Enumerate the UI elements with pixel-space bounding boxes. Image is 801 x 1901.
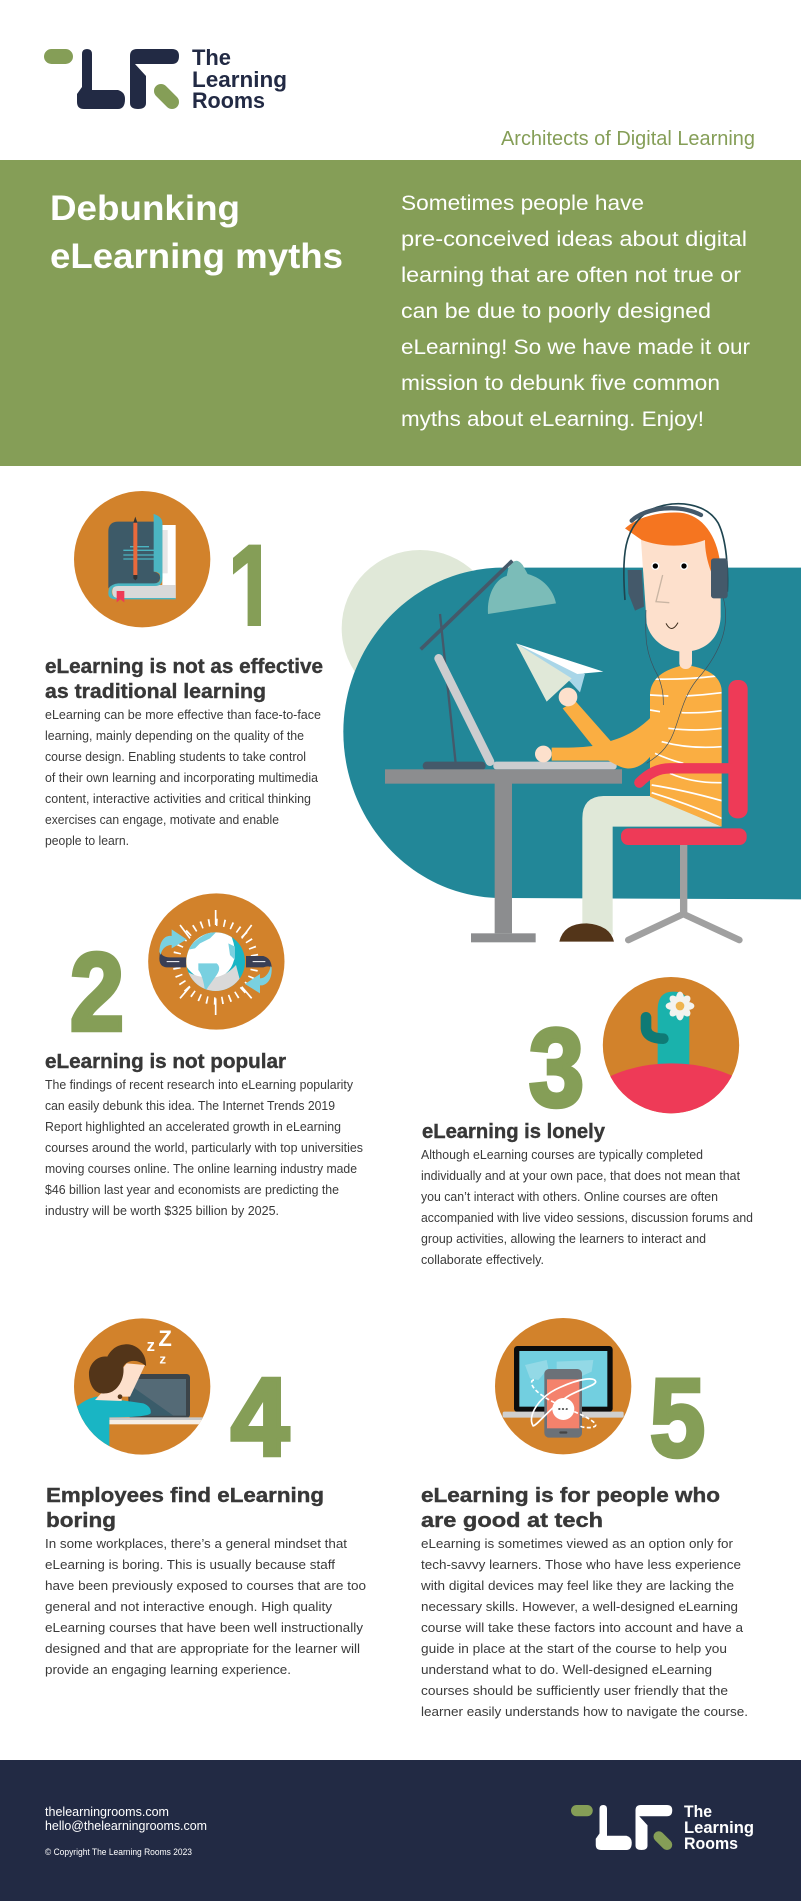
hands xyxy=(535,688,577,762)
body text: group activities, allowing the learners to interact and xyxy=(421,1231,706,1246)
heading: eLearning is not as effective xyxy=(45,655,323,678)
body text: have been previously exposed to courses that are too xyxy=(45,1578,366,1593)
header logo: Rooms xyxy=(192,88,265,113)
trousers and shoe xyxy=(559,796,722,942)
body text: individually and at your own pace, that does not mean that xyxy=(421,1168,740,1183)
footer contact text: hello@thelearningrooms.com xyxy=(45,1818,207,1833)
body text: tech-savvy learners. Those who have less experience xyxy=(421,1557,741,1572)
icon: person asleep at laptop: z xyxy=(159,1351,166,1366)
icon: globe with arrows xyxy=(148,893,284,1030)
body text: course design. Enabling students to take control xyxy=(45,749,306,764)
tagline: Architects of Digital Learning xyxy=(501,128,755,150)
body text: $46 billion last year and economists are predicting the xyxy=(45,1182,339,1197)
banner intro text: pre-conceived ideas about digital xyxy=(401,228,747,251)
body text: In some workplaces, there’s a general mindset that xyxy=(45,1536,347,1551)
heading: as traditional learning xyxy=(45,680,266,703)
body text: learner easily understands how to navigate the course. xyxy=(421,1704,748,1719)
body text: understand what to do. Well-designed eLearning xyxy=(421,1662,712,1677)
body text: you can’t interact with others. Online courses are often xyxy=(421,1189,718,1204)
banner intro text: myths about eLearning. Enjoy! xyxy=(401,408,704,431)
body text: The findings of recent research into eLearning popularity xyxy=(45,1077,353,1092)
body text xyxy=(45,707,321,848)
body text: course will take these factors into account and have a xyxy=(421,1620,744,1635)
banner intro text: eLearning! So we have made it our xyxy=(401,336,750,359)
header logo: The xyxy=(192,45,231,70)
banner intro text: learning that are often not true or xyxy=(401,264,741,287)
body text: eLearning courses that have been well instructionally xyxy=(45,1620,364,1635)
numeral 5: 5 xyxy=(650,1357,705,1480)
numeral 1: 1 xyxy=(223,516,283,671)
body text: learning, mainly depending on the quality of the xyxy=(45,728,304,743)
myth 2 panel xyxy=(45,893,363,1218)
desk xyxy=(385,769,622,942)
footer logo: The xyxy=(684,1803,712,1821)
green intro banner xyxy=(0,160,801,466)
body text: eLearning is boring. This is usually because staff xyxy=(45,1557,335,1572)
body text: of their own learning and incorporating multimedia xyxy=(45,770,319,785)
footer band xyxy=(0,1760,801,1901)
body text: people to learn. xyxy=(45,833,129,848)
body text xyxy=(420,1536,748,1719)
myth 4 panel xyxy=(45,1318,366,1677)
heading xyxy=(46,1484,324,1532)
body text: necessary skills. However, a well-designed eLearning xyxy=(421,1599,738,1614)
arms xyxy=(552,701,655,768)
body text: Report highlighted an accelerated growth in eLearning xyxy=(45,1119,341,1134)
header logo xyxy=(44,45,287,113)
banner intro text: Sometimes people have xyxy=(401,192,644,215)
banner title: eLearning myths xyxy=(50,237,343,276)
banner intro text xyxy=(401,192,750,431)
heading: eLearning is lonely xyxy=(422,1120,606,1143)
chair xyxy=(621,680,748,845)
heading: eLearning is not popular xyxy=(45,1050,286,1073)
heading: eLearning is for people who xyxy=(421,1484,720,1507)
illustration: learner at desk xyxy=(342,504,801,942)
icon: book xyxy=(74,491,210,627)
numeral 2: 2 xyxy=(70,931,124,1054)
icon: person asleep at laptop: Z xyxy=(158,1326,172,1351)
body text: general and not interactive enough. High quality xyxy=(45,1599,333,1614)
body text: collaborate effectively. xyxy=(421,1252,544,1267)
body text: eLearning is sometimes viewed as an option only for xyxy=(421,1536,734,1551)
banner title xyxy=(50,189,343,276)
body text xyxy=(45,1536,366,1677)
icon: laptop and phone xyxy=(495,1318,631,1454)
footer contact text: thelearningrooms.com xyxy=(45,1804,169,1819)
numeral 3: 3 xyxy=(529,1007,584,1130)
body text: exercises can engage, motivate and enable xyxy=(45,812,279,827)
body text: courses around the world, particularly with top universities xyxy=(45,1140,363,1155)
striped jumper xyxy=(552,666,722,827)
body text: content, interactive activities and critical thinking xyxy=(45,791,311,806)
myth 1 panel xyxy=(45,491,323,848)
body text: courses should be sufficiently user friendly that the xyxy=(421,1683,728,1698)
banner intro text: can be due to poorly designed xyxy=(401,300,711,323)
header logo: Learning xyxy=(192,67,287,92)
body text xyxy=(45,1077,363,1218)
heading: are good at tech xyxy=(421,1509,603,1532)
heading: boring xyxy=(46,1509,116,1532)
heading xyxy=(421,1484,720,1532)
heading xyxy=(45,655,323,703)
footer logo xyxy=(571,1803,754,1853)
laptop xyxy=(439,658,617,769)
body text xyxy=(421,1147,753,1267)
lamp xyxy=(421,561,556,770)
numeral 4: 4 xyxy=(231,1356,289,1479)
footer logo: Learning xyxy=(684,1819,754,1837)
body text: eLearning can be more effective than face-to-face xyxy=(45,707,321,722)
body text: designed and that are appropriate for the learner will xyxy=(45,1641,360,1656)
body text: can easily debunk this idea. The Internet Trends 2019 xyxy=(45,1098,335,1113)
body text: Although eLearning courses are typically completed xyxy=(421,1147,703,1162)
footer contact text: © Copyright The Learning Rooms 2023 xyxy=(45,1847,192,1857)
icon: person asleep at laptop: z xyxy=(147,1336,155,1355)
footer contact text xyxy=(45,1804,207,1857)
banner title: Debunking xyxy=(50,189,240,228)
body text: provide an engaging learning experience. xyxy=(45,1662,291,1677)
heading: Employees find eLearning xyxy=(46,1484,324,1507)
myth 5 panel xyxy=(420,1318,748,1719)
headphones xyxy=(624,504,728,763)
chair base xyxy=(628,843,739,940)
body text: industry will be worth $325 billion by 2025. xyxy=(45,1203,279,1218)
body text: moving courses online. The online learning industry made xyxy=(45,1161,357,1176)
footer logo: Rooms xyxy=(684,1835,738,1853)
banner intro text: mission to debunk five common xyxy=(401,372,720,395)
paper plane xyxy=(516,643,603,702)
myth 3 panel xyxy=(421,977,787,1267)
head xyxy=(625,513,721,669)
icon: cactus xyxy=(602,977,740,1114)
body text: guide in place at the start of the course to help you xyxy=(421,1641,727,1656)
icon: person asleep at laptop xyxy=(70,1318,210,1457)
body text: with digital devices may feel like they are lacking the xyxy=(420,1578,734,1593)
body text: accompanied with live video sessions, discussion forums and xyxy=(421,1210,753,1225)
